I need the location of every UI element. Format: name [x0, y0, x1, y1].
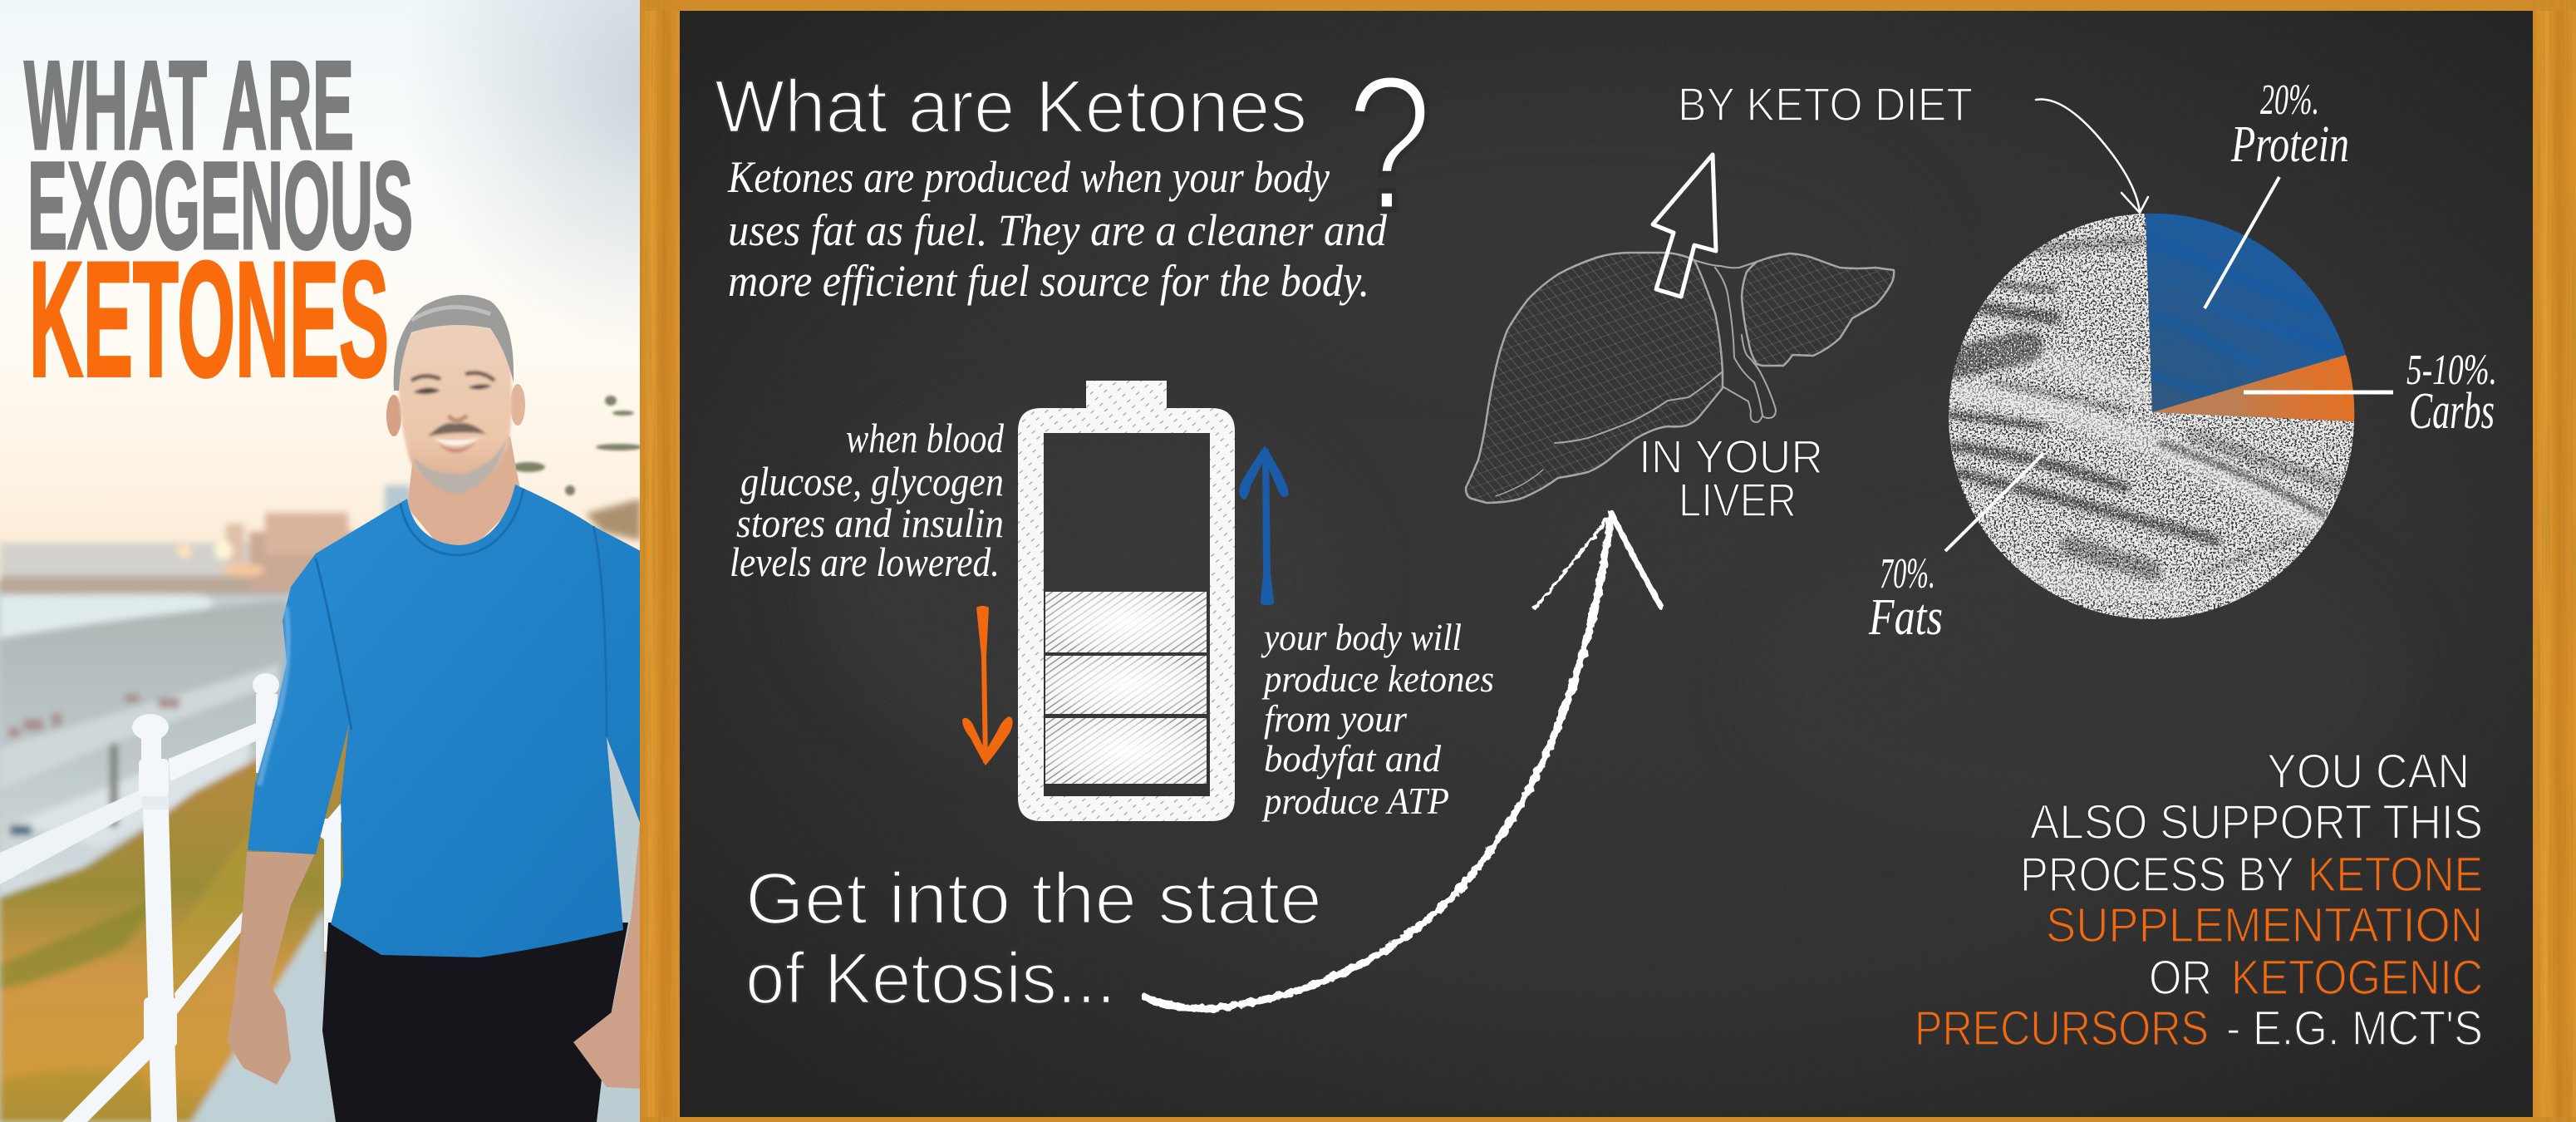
heading: get into the state of ketosis: of Ketosis... [745, 938, 1116, 1019]
title: WHAT ARE [24, 35, 354, 176]
heading: get into the state of ketosis: Get into the state [745, 859, 1322, 939]
text block: body will produce ketones: from your [1264, 697, 1408, 740]
battery cap [1086, 381, 1167, 411]
label: 5-10% carbs [2406, 347, 2497, 440]
right forearm and hand [573, 814, 641, 1089]
label: 5-10% carbs: Carbs [2409, 383, 2495, 440]
battery cells [1045, 592, 1207, 784]
title [24, 35, 413, 411]
chart: macronutrient pie [1944, 208, 2360, 623]
text block: ketone supplementation [1915, 745, 2483, 1056]
face [397, 321, 512, 494]
wooden frame [640, 0, 2576, 1122]
collar seam [401, 489, 524, 555]
ears [386, 395, 401, 436]
text block: ketone supplementation: KETOGENIC [2231, 951, 2483, 1005]
text block: body will produce ketones: your body will [1261, 616, 1462, 658]
label: 5-10% carbs: 5-10%. [2406, 347, 2497, 394]
text block: blood glucose: glucose, glycogen [740, 458, 1004, 504]
arrow: big curved chalk arrow [1145, 513, 1661, 1009]
smile [434, 438, 480, 445]
text block: ketones definition: Ketones are produced when your body [727, 152, 1330, 202]
blurred seaside background [0, 482, 415, 1122]
arrow: sketched up arrow [1653, 155, 1716, 297]
rail lower right [175, 912, 243, 1014]
rail lower left [62, 1039, 150, 1122]
text block: ketone supplementation: ALSO SUPPORT THIS [2030, 795, 2483, 849]
text block: ketone supplementation: OR [2149, 951, 2212, 1005]
text block: ketones definition: more efficient fuel source for the body. [728, 256, 1369, 306]
text block: blood glucose: when blood [846, 415, 1005, 461]
label: 70% fats [1868, 550, 1943, 646]
text block: blood glucose [730, 415, 1005, 585]
callout line: fats [1945, 454, 2043, 551]
divider and tubes [1555, 372, 1723, 443]
text block: ketones definition: uses fat as fuel. They are a cleaner and [728, 205, 1388, 255]
text block: blood glucose: levels are lowered. [730, 539, 1000, 585]
text block: ketone supplementation: KETONE [2308, 848, 2483, 902]
icon: battery [1018, 381, 1235, 821]
callout line: protein [2205, 177, 2279, 308]
text: EXOGENOUS [27, 135, 413, 275]
label: 20% protein [2230, 76, 2349, 173]
label: in your liver [1639, 431, 1823, 527]
rail top right [169, 716, 273, 781]
big question mark: ? [1346, 36, 1433, 251]
text block: body will produce ketones: produce ATP [1261, 780, 1449, 822]
pie slice: carbs 5-10% [2152, 355, 2354, 421]
heading: get into the state of ketosis [745, 859, 1322, 1019]
text block: body will produce ketones [1261, 616, 1494, 822]
pants [322, 923, 628, 1122]
text block: ketone supplementation: PROCESS BY [2020, 848, 2294, 902]
pie slice: fats 70% [1944, 208, 2360, 623]
text block: body will produce ketones: bodyfat and [1264, 737, 1442, 780]
label: 70% fats: Fats [1868, 589, 1943, 646]
rail top left [0, 791, 142, 884]
callout line: carbs [2244, 391, 2393, 394]
left forearm and hand [227, 852, 316, 1085]
arrow: thin curved pointer to pie [2036, 100, 2148, 213]
right lobe [1742, 253, 1894, 366]
label: in your liver: LIVER [1679, 474, 1797, 527]
text block: ketones definition [727, 152, 1388, 306]
text block: ketone supplementation: - E.G. MCT'S [2226, 1001, 2483, 1056]
arrow: blue up [1239, 445, 1289, 605]
heading: what are ketones: What are Ketones [715, 66, 1307, 149]
photo: man walking on seaside promenade [0, 0, 642, 1122]
pie slice: protein 20% [2146, 214, 2346, 412]
text: KETONES [29, 228, 389, 411]
text block: ketone supplementation: PRECURSORS [1915, 1001, 2209, 1056]
eyes and brows [413, 384, 492, 394]
palms [512, 396, 642, 540]
man [227, 295, 641, 1122]
label: 70% fats: 70%. [1880, 550, 1935, 598]
text block: body will produce ketones: produce ketones [1261, 657, 1494, 700]
beard [412, 434, 509, 494]
panel: chalkboard [680, 11, 2533, 1117]
text block: blood glucose: stores and insulin [736, 499, 1004, 546]
label: in your liver: IN YOUR [1639, 431, 1823, 484]
post [143, 809, 177, 1122]
battery shell [1018, 408, 1235, 821]
hair [394, 295, 514, 391]
arrow: orange down [962, 606, 1013, 765]
text block: ketone supplementation: YOU CAN [2267, 745, 2470, 799]
moustache [428, 423, 486, 436]
large lobe [1466, 253, 1723, 503]
label: by keto diet: BY KETO DIET [1678, 78, 1973, 131]
neck [407, 436, 520, 545]
label: 20% protein: 20%. [2260, 76, 2319, 124]
text block: ketone supplementation: SUPPLEMENTATION [2046, 898, 2483, 952]
label: 20% protein: Protein [2230, 116, 2349, 173]
fence [0, 673, 349, 1122]
icon: liver sketch [1466, 253, 1894, 503]
shirt [248, 485, 641, 957]
